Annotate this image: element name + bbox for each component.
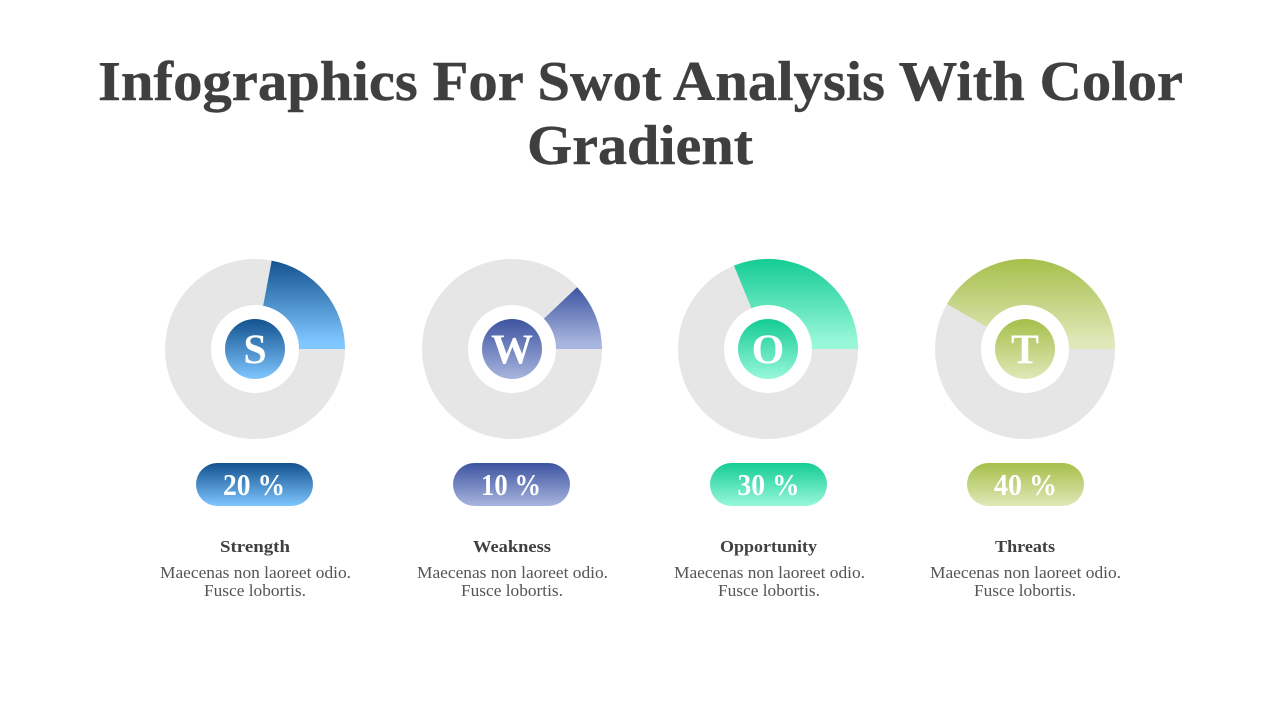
percentage pill: 20 % bbox=[196, 463, 313, 506]
title bbox=[98, 51, 1183, 177]
description: strength: Fusce lobortis. bbox=[204, 581, 306, 600]
description: opportunity bbox=[674, 563, 865, 600]
donut chart: threats 40%: T bbox=[1011, 328, 1039, 374]
percentage pill: 40 %: 40 % bbox=[994, 467, 1057, 502]
donut chart: threats 40% bbox=[935, 259, 1115, 439]
description: strength: Maecenas non laoreet odio. bbox=[160, 563, 351, 582]
percentage pill: 40 % bbox=[967, 463, 1084, 506]
title: Infographics For Swot Analysis With Color bbox=[98, 51, 1183, 113]
percentage pill: 30 % bbox=[710, 463, 827, 506]
percentage pill: 30 %: 30 % bbox=[738, 467, 800, 502]
donut chart: weakness 10% bbox=[422, 259, 602, 439]
percentage pill: 10 %: 10 % bbox=[481, 467, 541, 502]
panel: opportunity bbox=[674, 259, 865, 600]
donut chart: strength 20% bbox=[165, 259, 345, 439]
description: opportunity: Maecenas non laoreet odio. bbox=[674, 563, 865, 582]
label: Opportunity: Opportunity bbox=[720, 537, 818, 556]
donut chart: opportunity 30%: O bbox=[752, 328, 784, 374]
donut chart: weakness 10%: W bbox=[491, 328, 533, 374]
description: strength bbox=[160, 563, 351, 600]
label: Strength: Strength bbox=[220, 537, 291, 556]
description: threats: Maecenas non laoreet odio. bbox=[930, 563, 1121, 582]
description: opportunity: Fusce lobortis. bbox=[718, 581, 820, 600]
description: threats: Fusce lobortis. bbox=[974, 581, 1076, 600]
label: Weakness: Weakness bbox=[473, 537, 551, 556]
label: Threats: Threats bbox=[995, 537, 1055, 556]
percentage pill: 10 % bbox=[453, 463, 570, 506]
panel: strength bbox=[160, 259, 351, 600]
percentage pill: 20 %: 20 % bbox=[223, 467, 285, 502]
panel: threats bbox=[930, 259, 1121, 600]
panel: weakness bbox=[417, 259, 608, 600]
donut chart: strength 20%: S bbox=[243, 328, 267, 374]
description: weakness bbox=[417, 563, 608, 600]
description: threats bbox=[930, 563, 1121, 600]
description: weakness: Fusce lobortis. bbox=[461, 581, 563, 600]
description: weakness: Maecenas non laoreet odio. bbox=[417, 563, 608, 582]
title: Gradient bbox=[527, 115, 753, 177]
donut chart: opportunity 30% bbox=[678, 259, 858, 439]
